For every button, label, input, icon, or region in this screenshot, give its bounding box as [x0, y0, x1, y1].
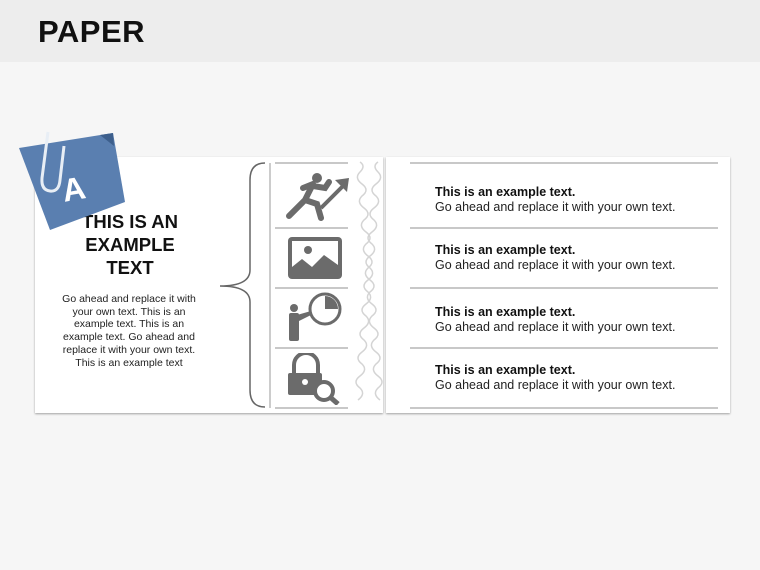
- right dividers: [410, 162, 718, 409]
- text row 3: [435, 305, 675, 334]
- left heading: [82, 211, 178, 278]
- panel: right paper: [386, 157, 730, 413]
- icon: picture: [288, 237, 342, 279]
- left body text: Go ahead and replace it with your own text. This is an example text. This is an example text. Go ahead and replace it with your own text. This is an example text: [62, 293, 196, 369]
- torn edge: [355, 162, 383, 400]
- header band: [0, 0, 760, 62]
- text row 2: [435, 243, 675, 272]
- text row 1: This is an example text.: [435, 185, 575, 199]
- left heading: TEXT: [106, 257, 154, 278]
- text row 2: Go ahead and replace it with your own text.: [435, 258, 675, 272]
- text row 1: [435, 185, 675, 214]
- text row 3: Go ahead and replace it with your own text.: [435, 320, 675, 334]
- icon: blue tag with paperclip: A: [59, 169, 88, 209]
- text row 4: [435, 363, 675, 392]
- brace: [220, 162, 271, 408]
- title: PAPER: [38, 14, 145, 49]
- icon column dividers: [275, 162, 348, 409]
- left heading: EXAMPLE: [85, 234, 175, 255]
- icon: blue tag with paperclip: [19, 132, 125, 230]
- panel: left paper: [35, 157, 383, 413]
- text row 4: Go ahead and replace it with your own text.: [435, 378, 675, 392]
- text row 3: This is an example text.: [435, 305, 575, 319]
- icon: lock with magnifier: [288, 353, 340, 405]
- left heading: THIS IS AN: [82, 211, 178, 232]
- icon: runner with arrow: [286, 173, 349, 221]
- text row 2: This is an example text.: [435, 243, 575, 257]
- icon: presenter with pie chart: [289, 292, 342, 341]
- text row 1: Go ahead and replace it with your own text.: [435, 200, 675, 214]
- text row 4: This is an example text.: [435, 363, 575, 377]
